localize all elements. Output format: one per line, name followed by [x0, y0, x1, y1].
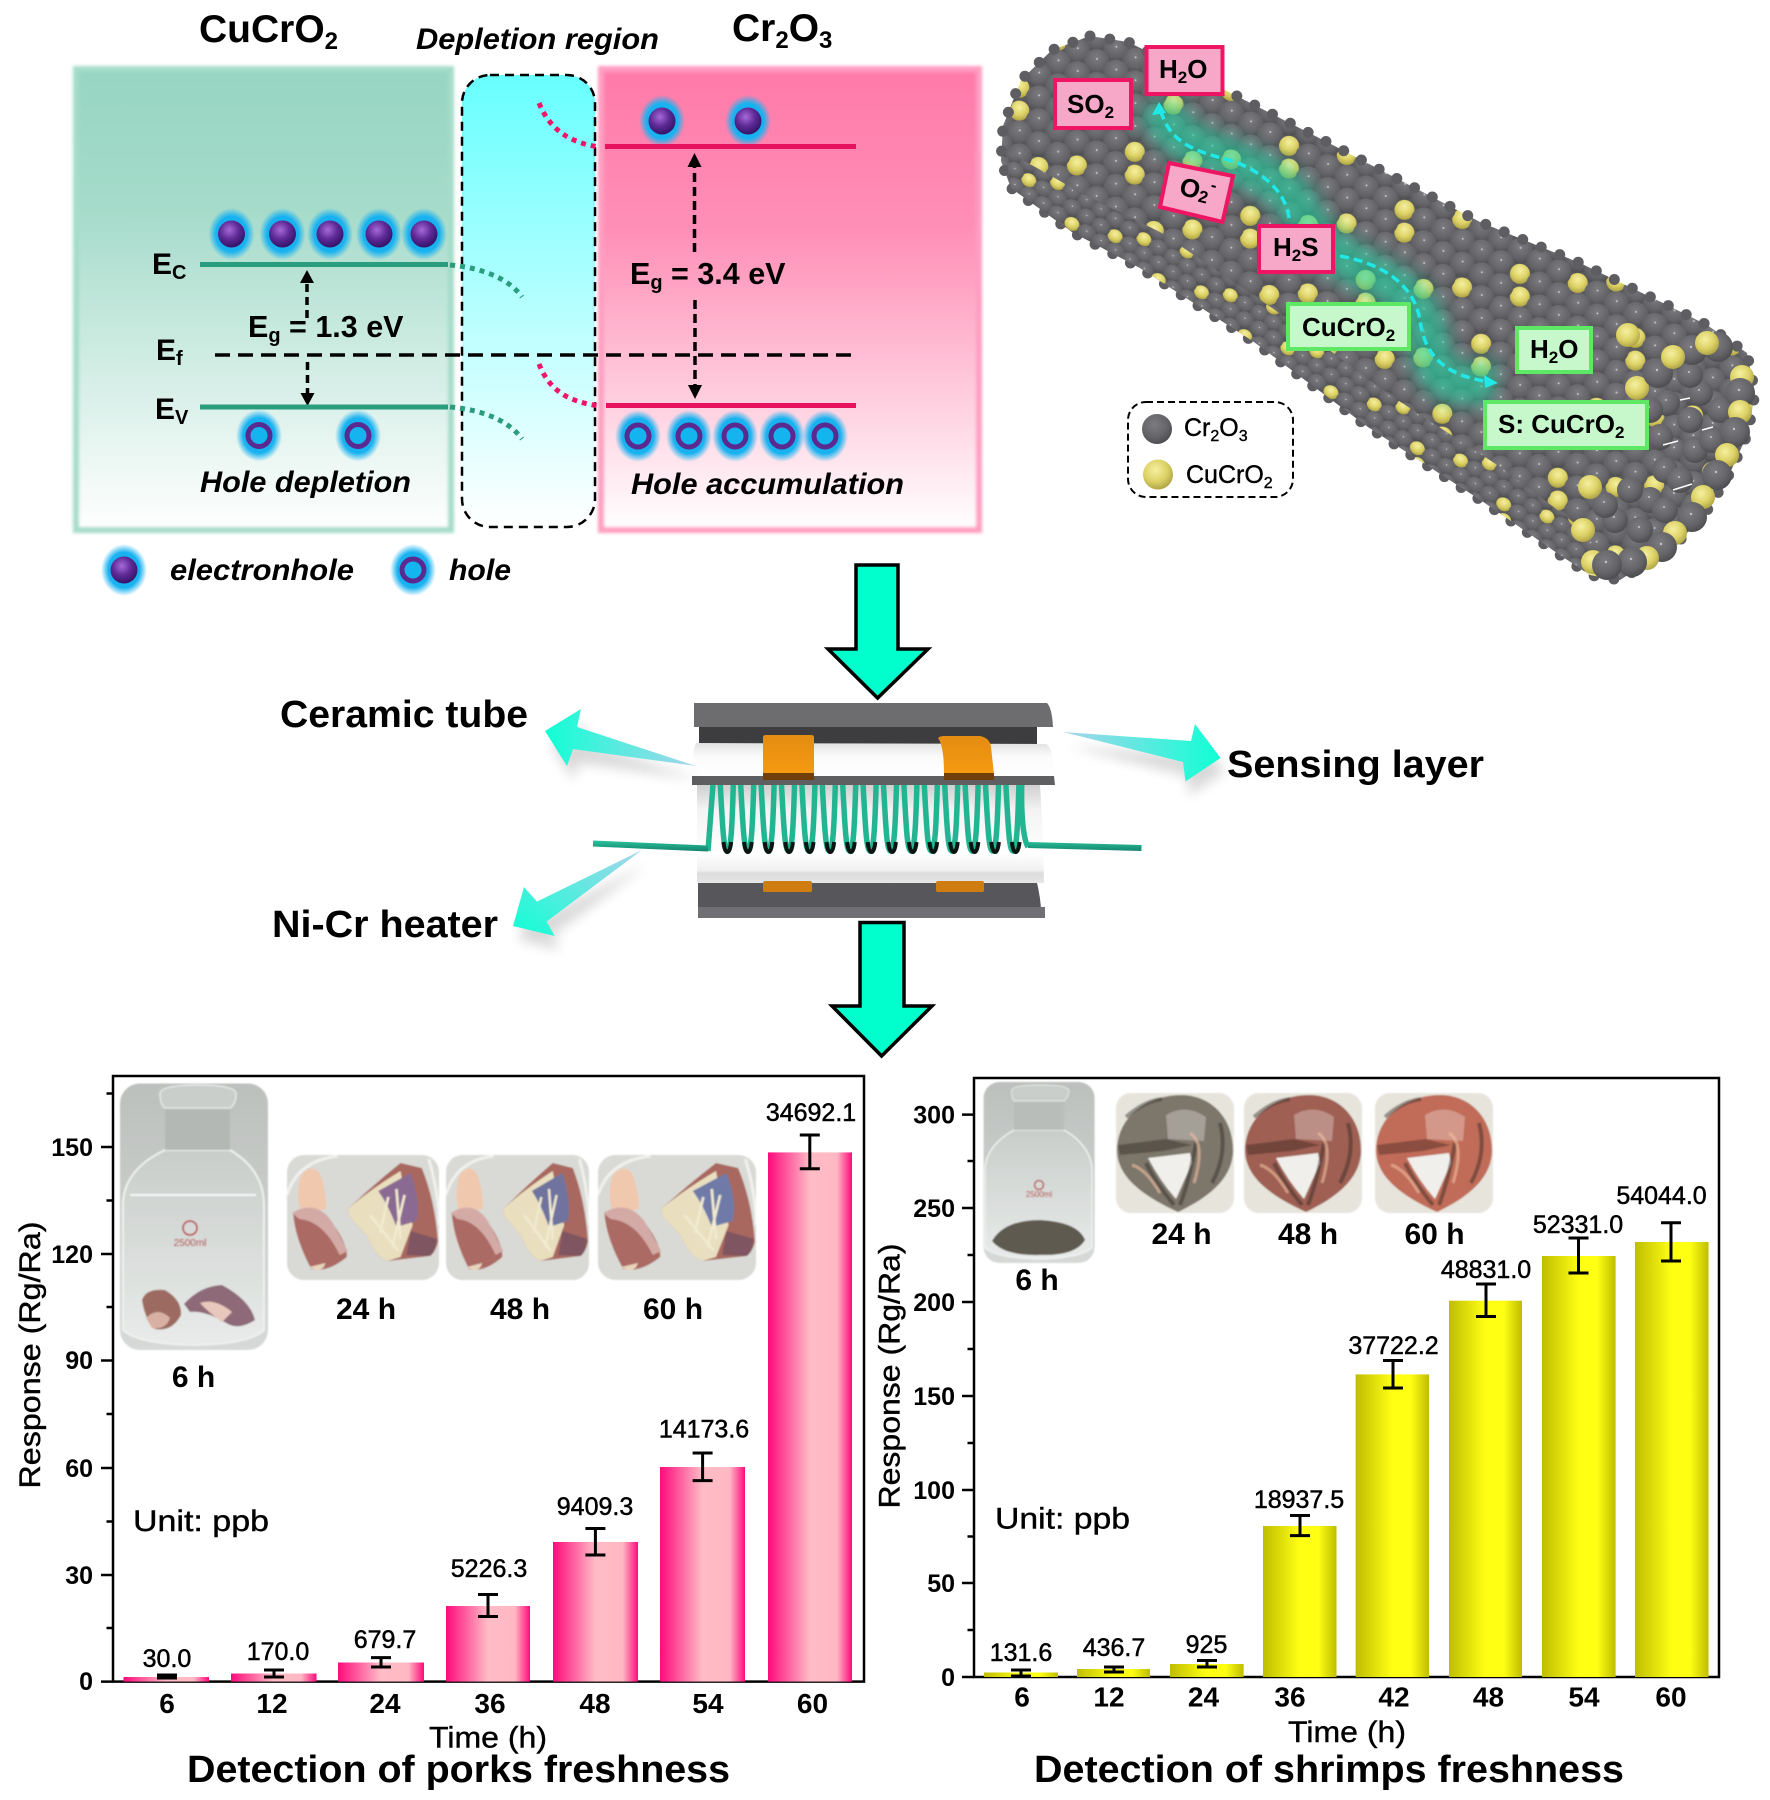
label: Ev: E: [155, 393, 175, 426]
y axis labels: 60: [65, 1455, 93, 1483]
label: Eg = 1.3 eV: E: [248, 310, 268, 344]
label: Cr2O3: O: [1219, 414, 1239, 442]
bars: [124, 1152, 852, 1682]
fermi level dashed line: [215, 353, 858, 357]
label: ceramic tube: Ceramic tube: [280, 694, 528, 736]
label: H2O green: [1517, 328, 1591, 372]
photo captions: 6 h: [1015, 1264, 1059, 1297]
label: hole: hole: [449, 554, 511, 587]
heading: depletion region: Depletion region: [416, 23, 659, 56]
photo captions: 60 h: [643, 1293, 703, 1326]
heading: CuCrO2: 2: [325, 28, 338, 55]
value labels: [990, 1182, 1707, 1667]
error bars: [1011, 1223, 1681, 1676]
conduction band line: [200, 262, 448, 267]
y axis labels: 90: [65, 1347, 93, 1375]
label: SO2: 2: [1105, 103, 1114, 122]
photo captions: 6 h: [172, 1361, 215, 1394]
label: H2O pink: [1146, 47, 1222, 94]
photo: shrimp in bottle at 6 h: 2500ml: [1026, 1190, 1052, 1199]
label: Cr2O3: 3: [1239, 428, 1248, 445]
electrons on Ec: [208, 208, 447, 260]
photo captions: [1015, 1218, 1465, 1297]
photo captions: [172, 1293, 703, 1394]
photo captions: 48 h: [1278, 1218, 1338, 1251]
x axis labels: 54: [1568, 1682, 1600, 1712]
tube end rim atoms: [1571, 323, 1755, 580]
value labels: 48831.0: [1441, 1256, 1531, 1284]
label: CuCrO2 green: [1288, 304, 1409, 349]
label: Eg = 3.4 eV: E: [630, 257, 650, 291]
dense lower side of tube: [1005, 150, 1605, 578]
label: Eg = 3.4 eV: = 3.4 eV: [663, 257, 786, 291]
y axis labels: 0: [79, 1668, 93, 1696]
y axis ticks: [101, 1094, 113, 1682]
photo: pork in bottle at 6 h: 2500ml: [174, 1238, 206, 1249]
y axis labels: 100: [913, 1477, 955, 1505]
panel: Cr2O3 band diagram: [601, 7, 979, 530]
photo captions: 60 h: [1404, 1218, 1465, 1251]
up arrow: [300, 270, 314, 318]
x axis labels: 36: [1274, 1682, 1306, 1712]
x axis labels: 12: [1093, 1682, 1125, 1712]
label: H2S: H: [1273, 232, 1292, 262]
label: H2S: [1259, 226, 1333, 272]
label: H2O pink: O: [1187, 54, 1207, 84]
y axis labels: [51, 1134, 93, 1696]
caption: hole depletion: Hole depletion: [200, 466, 411, 499]
tube end interior atoms: [1592, 362, 1733, 543]
label: H2O green: 2: [1549, 348, 1558, 367]
x axis title: Time (h): [429, 1722, 547, 1754]
label: Ec: E: [152, 248, 172, 281]
down arrow: [300, 362, 314, 406]
label: Cr2O3: 2: [1210, 428, 1219, 445]
label: Eg = 3.4 eV: g: [650, 272, 663, 294]
value labels: 170.0: [247, 1638, 309, 1666]
x axis labels: [159, 1688, 828, 1719]
icon: Cr2O3 atom: [1142, 414, 1172, 444]
panel: CuCrO2 band diagram: [76, 8, 451, 530]
arrow: Ni-Cr heater pointer: [513, 850, 648, 950]
x axis labels: 36: [474, 1688, 506, 1719]
label: Ef: E: [156, 334, 176, 367]
y axis title: Response (Rg/Ra): [874, 1244, 906, 1508]
label: CuCrO2: 2: [1264, 475, 1273, 492]
value labels: 9409.3: [557, 1493, 633, 1521]
chart title: Detection of porks freshness: [187, 1749, 730, 1791]
label: H2O green: O: [1558, 334, 1578, 364]
x axis labels: 60: [1655, 1682, 1687, 1712]
upper dark housing: [694, 703, 1053, 745]
valence band line: [606, 403, 856, 408]
chart: pork freshness: [14, 1076, 864, 1791]
value labels: 925: [1186, 1631, 1227, 1659]
y axis labels: 250: [913, 1195, 955, 1223]
value labels: 436.7: [1083, 1634, 1145, 1662]
panel: depletion region: [416, 23, 659, 527]
photo captions: 24 h: [336, 1293, 396, 1326]
label: S: CuCrO2: [1485, 402, 1647, 448]
label: Cr2O3: Cr: [1184, 414, 1210, 442]
lower inner tube: [697, 785, 1044, 883]
x axis labels: 54: [692, 1688, 724, 1719]
nanotube illustration: [1001, 36, 1755, 580]
sensor device: [593, 703, 1142, 918]
y axis labels: 300: [913, 1102, 955, 1130]
down arrow: [688, 300, 702, 399]
unit note: Unit: ppb: [995, 1502, 1130, 1536]
label: H2S: 2: [1292, 246, 1301, 265]
arrow: device to charts: [832, 922, 932, 1056]
label: electronhole: electronhole: [170, 554, 354, 587]
conduction band line: [605, 144, 856, 149]
x axis labels: 12: [256, 1688, 288, 1719]
label: O2-: O: [1177, 171, 1204, 205]
heading: Cr2O3: O: [789, 7, 819, 50]
arrow: sensing layer pointer: [1063, 724, 1224, 796]
up arrow: [688, 153, 702, 252]
x axis labels: 48: [579, 1688, 611, 1719]
bars: [984, 1242, 1708, 1677]
photos: pork at 24, 48, 60 h: [287, 1155, 756, 1280]
chart: shrimp freshness: [874, 1078, 1719, 1791]
legend: atom types: [1128, 402, 1293, 497]
tube body of atoms: [1001, 36, 1755, 580]
label: H2O pink: H: [1159, 54, 1178, 84]
upper white ceramic tube: [692, 743, 1054, 777]
value labels: 37722.2: [1348, 1332, 1439, 1360]
photos: shrimp at 24, 48, 60 h: [1116, 1093, 1493, 1213]
heading: Cr2O3: 2: [775, 27, 789, 54]
y axis labels: [913, 1102, 955, 1692]
x axis labels: 48: [1473, 1682, 1504, 1712]
x axis labels: 60: [797, 1688, 828, 1719]
label: Eg = 1.3 eV: = 1.3 eV: [281, 310, 404, 344]
glowing reaction band: [1159, 103, 1495, 384]
holes under Ev: [236, 410, 381, 462]
caption: hole accumulation: Hole accumulation: [631, 468, 904, 501]
label: S: CuCrO2: 2: [1615, 423, 1624, 442]
x axis title: Time (h): [1288, 1716, 1406, 1749]
x axis labels: 24: [369, 1688, 401, 1719]
lower dark housing: [698, 883, 1045, 918]
value labels: 18937.5: [1254, 1486, 1344, 1514]
lower orange electrodes: [763, 881, 984, 892]
x axis labels: [1014, 1682, 1687, 1712]
value labels: 54044.0: [1616, 1182, 1707, 1210]
photo captions: 48 h: [490, 1293, 550, 1326]
valence band line: [200, 404, 448, 410]
unit note: Unit: ppb: [133, 1505, 269, 1538]
photo: pork in bottle at 6 h: [120, 1084, 268, 1350]
value labels: [143, 1099, 856, 1673]
label: O2-: 2: [1196, 187, 1210, 208]
x axis labels: 24: [1188, 1682, 1219, 1712]
y axis title: Response (Rg/Ra): [14, 1222, 47, 1488]
label: O2-: [1160, 163, 1233, 222]
panel background: Cr2O3: [601, 69, 979, 530]
label: Ni-Cr heater: Ni-Cr heater: [272, 904, 498, 946]
holes under valence band: [615, 410, 848, 462]
heater wires: [593, 844, 1142, 848]
coil shadow at loop bottoms: [724, 842, 1019, 852]
depletion region box: [462, 75, 595, 527]
label: Ef: f: [176, 348, 183, 370]
y axis labels: 120: [51, 1241, 93, 1269]
label: SO2: [1055, 80, 1131, 128]
label: SO2: SO: [1067, 89, 1105, 119]
y axis labels: 50: [927, 1570, 955, 1598]
label: O2-: -: [1209, 176, 1219, 196]
value labels: 52331.0: [1533, 1211, 1623, 1239]
upper orange electrodes: [763, 735, 994, 780]
arrow: ceramic tube pointer: [545, 709, 702, 780]
label: Eg = 1.3 eV: g: [268, 325, 281, 347]
label: CuCrO2: CuCrO: [1186, 461, 1264, 489]
curved band bending: [450, 103, 600, 439]
y axis labels: 30: [65, 1562, 93, 1590]
y axis ticks: [962, 1115, 974, 1677]
y axis labels: 0: [941, 1664, 955, 1692]
label: CuCrO2 green: 2: [1386, 326, 1395, 345]
label: sensing layer: Sensing layer: [1227, 744, 1484, 786]
y axis labels: 200: [913, 1289, 955, 1317]
value labels: 679.7: [354, 1626, 416, 1654]
plot frame: [113, 1076, 864, 1682]
heading: CuCrO2: CuCrO: [199, 8, 325, 51]
icon: electron: [101, 544, 147, 596]
y axis labels: 150: [51, 1134, 93, 1162]
label: H2S: S: [1301, 232, 1319, 262]
label: CuCrO2 green: CuCrO: [1302, 312, 1386, 342]
value labels: 14173.6: [659, 1416, 749, 1444]
chart title: Detection of shrimps freshness: [1034, 1749, 1624, 1791]
value labels: 34692.1: [766, 1099, 856, 1127]
photo captions: 24 h: [1151, 1218, 1212, 1251]
plot frame: [974, 1078, 1719, 1677]
label: Ec: C: [172, 262, 186, 284]
error bars: [157, 1135, 820, 1678]
label: S: CuCrO2: S: CuCrO: [1498, 409, 1615, 439]
label: Ev: V: [175, 407, 189, 429]
value labels: 5226.3: [451, 1555, 527, 1583]
electrons above conduction band: [639, 95, 771, 147]
label: H2O green: H: [1530, 334, 1549, 364]
photo: shrimp in bottle at 6 h: [984, 1082, 1095, 1263]
cyan dashed path to H2O: [1152, 102, 1289, 218]
cyan dashed path to S:CuCrO2: [1340, 256, 1498, 388]
x axis labels: 6: [159, 1688, 175, 1719]
value labels: 131.6: [990, 1639, 1052, 1667]
heading: Cr2O3: Cr: [732, 7, 775, 50]
value labels: 30.0: [143, 1645, 191, 1673]
y axis labels: 150: [913, 1383, 955, 1411]
dark lip below tube: [692, 776, 1055, 785]
icon: CuCrO2 atom: [1143, 460, 1173, 490]
panel background: CuCrO2: [76, 69, 451, 530]
legend: electron and hole: [101, 544, 511, 596]
legend box: [1128, 402, 1293, 497]
x axis labels: 6: [1014, 1682, 1030, 1712]
heading: Cr2O3: 3: [819, 27, 832, 54]
heating coil: [708, 785, 1028, 851]
arrow: nanotube to device: [828, 565, 928, 698]
label: H2O pink: 2: [1178, 68, 1187, 87]
x axis labels: 42: [1378, 1682, 1410, 1712]
icon: hole: [390, 544, 436, 596]
